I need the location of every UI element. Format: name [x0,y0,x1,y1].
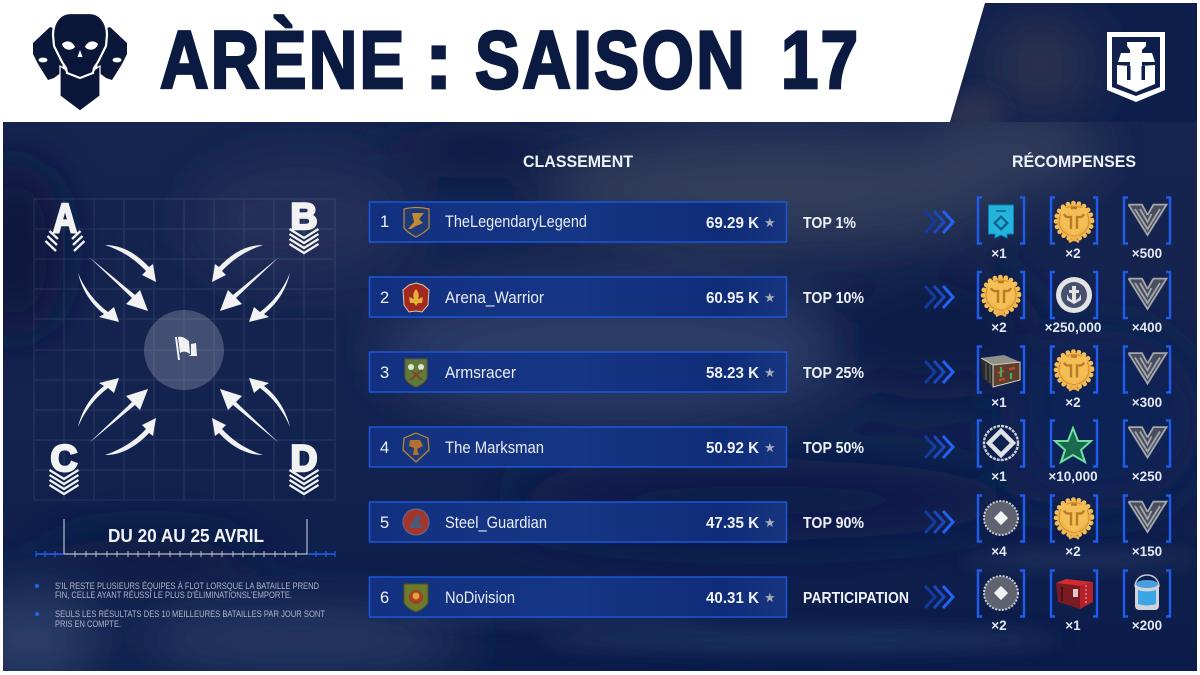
title [160,14,858,106]
icon: silver token [984,426,1018,460]
arrows from D [212,378,290,455]
row 2: Arena_Warrior [445,289,544,307]
icon: crate [981,355,1020,387]
rewards row 3: ×1 [991,395,1007,410]
icon: blue certificate [988,205,1014,238]
map panel [34,195,335,500]
rewards row 5: ×4 [991,544,1007,559]
team badge C [50,438,78,494]
icon: three skulls [33,13,127,111]
rewards row 1 [978,198,1170,261]
row 2 [370,277,953,317]
rewards row 6: ×2 [991,618,1007,633]
rewards row 3 [978,346,1170,410]
row 6: ★ [764,590,776,605]
timeline [36,519,335,557]
icon: flag [175,337,197,360]
row 4: ★ [764,440,776,455]
icon: green star [1055,428,1091,462]
arrows from A [78,245,156,322]
emblem: clan 2 [403,283,429,312]
rewards row 4: ×250 [1132,469,1162,484]
row 6 [370,577,953,617]
icon: red box [1056,579,1093,609]
title: 17 [781,14,858,105]
row 6: 6 [380,589,389,607]
row 5: ★ [764,515,776,530]
rewards row 5 [978,496,1170,559]
title: : [425,15,452,106]
row 1: 69.29 K [706,215,759,232]
rewards row 4: ×1 [991,469,1007,484]
row 3: Armsracer [445,364,516,382]
row 2: 60.95 K [706,290,759,307]
notes [35,581,326,629]
right skull [96,27,127,80]
rewards row 2 [978,272,1170,335]
row 3: TOP 25% [803,365,864,382]
team badge A [46,195,84,251]
rewards row 4: ×10,000 [1048,469,1098,484]
rewards row 4 [978,420,1170,484]
row 1: TheLegendaryLegend [445,213,587,231]
row 2: ★ [764,290,776,305]
row 6: NoDivision [445,589,515,607]
heading: rewards: RÉCOMPENSES [1012,152,1136,171]
emblem: clan 1 [404,208,429,237]
banner below skull [60,66,100,111]
row 3 [370,352,953,392]
team badge D [290,438,318,494]
notes: SEULS LES RÉSULTATS DES 10 MEILLEURES BATAILLES PAR JOUR SONT [55,609,326,619]
icon: game logo [1107,32,1165,102]
row 1: TOP 1% [803,215,856,232]
emblem: clan 3 [405,359,427,387]
rewards row 1: ×2 [1065,246,1081,261]
team badge A: A [53,195,77,241]
centre skull [53,13,107,78]
row 5: TOP 90% [803,515,864,532]
row 1: 1 [380,213,389,231]
title: ARÈNE [160,14,404,105]
notes: FIN, CELLE AYANT RÉUSSI LE PLUS D'ÉLIMINATIONSL'EMPORTE. [55,590,292,600]
arrows from C [78,378,156,455]
row 4: TOP 50% [803,440,864,457]
rewards row 1: ×1 [991,246,1007,261]
rewards row 6: ×1 [1065,618,1081,633]
rewards row 5: ×150 [1132,544,1162,559]
rewards row 1: ×500 [1132,246,1162,261]
row 5: 47.35 K [706,515,759,532]
notes: PRIS EN COMPTE. [55,619,121,629]
left skull [33,27,64,80]
row 4 [370,427,953,467]
rewards row 3: ×300 [1132,395,1162,410]
rewards row 2: ×400 [1132,320,1162,335]
capture zone circle [144,310,224,390]
rewards row 5: ×2 [1065,544,1081,559]
team badge C: C [50,438,78,479]
row 6: 40.31 K [706,590,759,607]
notes: S'IL RESTE PLUSIEURS ÉQUIPES À FLOT LORSQUE LA BATAILLE PREND [55,581,319,591]
emblem: clan 4 [403,433,429,462]
map grid [34,199,335,500]
row 3: 3 [380,364,389,382]
row 1: ★ [764,215,776,230]
team badge D: D [290,438,318,479]
emblem: clan 5 [403,509,429,535]
row 5 [370,502,953,542]
rewards row 6 [978,570,1170,633]
row 6: PARTICIPATION [803,590,909,607]
heading: ranking: CLASSEMENT [523,152,634,171]
row 4: 4 [380,439,389,457]
dates: DU 20 AU 25 AVRIL [108,526,264,546]
row 5: Steel_Guardian [445,514,547,532]
rewards row 2: ×250,000 [1045,320,1101,335]
row 2: TOP 10% [803,290,864,307]
row 3: ★ [764,365,776,380]
row 5: 5 [380,514,389,532]
title: SAISON [475,14,745,105]
row 3: 58.23 K [706,365,759,382]
emblem: clan 6 [404,584,428,612]
row 4: The Marksman [445,439,544,457]
team badge B [290,196,318,253]
team badge B: B [290,196,318,237]
rewards row 2: ×2 [991,320,1007,335]
rewards row 6: ×200 [1132,618,1162,633]
icon: paint bucket [1135,575,1159,610]
rewards row 3: ×2 [1065,395,1081,410]
row 1 [370,202,953,242]
row 4: 50.92 K [706,440,759,457]
icon: credits coin [1056,277,1092,313]
row 2: 2 [380,289,389,307]
top right banner [950,3,1197,122]
arrows from B [212,245,290,322]
